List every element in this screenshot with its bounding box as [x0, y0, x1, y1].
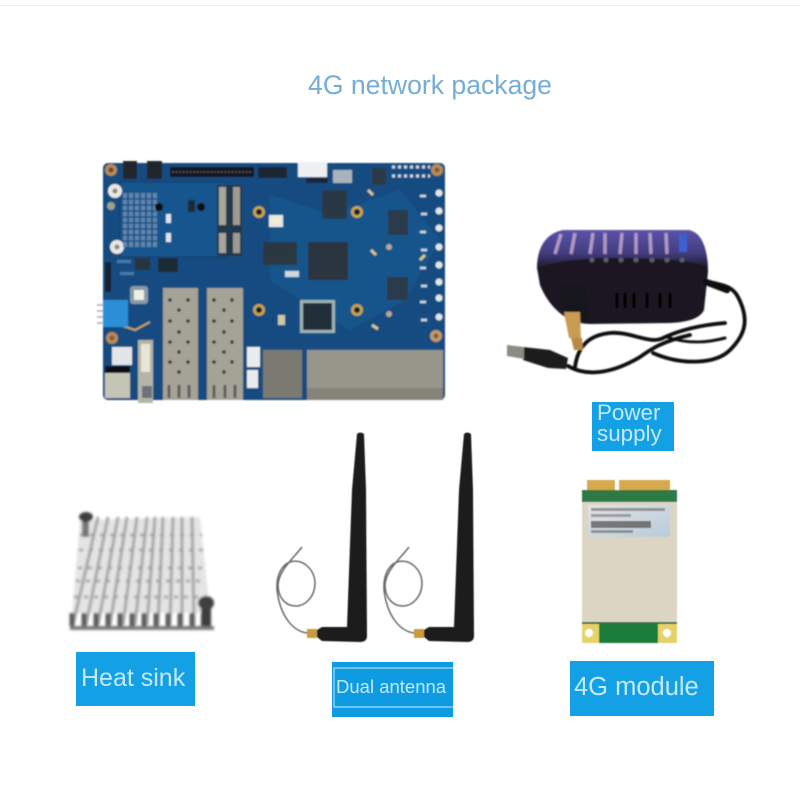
label: 4G module: 4G module: [574, 673, 699, 701]
antenna 1: [277, 432, 367, 642]
mounting holes: [105, 164, 443, 344]
label: power supply: Power: [597, 400, 661, 425]
adapter cable: [568, 282, 745, 372]
antenna 2: [384, 432, 474, 642]
RJ45 ports and connectors: [247, 347, 443, 400]
heat sink screws: [79, 512, 214, 626]
label: 4G module: [570, 661, 714, 716]
label: power supply: supply: [597, 421, 663, 446]
router board: [97, 161, 445, 403]
DC barrel connector: [507, 345, 568, 369]
SFP cages: [163, 288, 243, 400]
PCB pad grid: [123, 193, 205, 247]
left edge parts: [97, 300, 153, 403]
label: heat sink: Heat sink: [81, 664, 186, 692]
module sticker: [588, 505, 670, 537]
title: 4G network package: [308, 70, 552, 100]
top connectors: [123, 161, 430, 185]
status LED and small parts: [105, 258, 178, 330]
4G module: [582, 480, 677, 643]
label: dual antenna: [332, 662, 453, 717]
chips: [263, 190, 408, 333]
adapter body: [537, 230, 708, 324]
right side pads: [368, 190, 442, 329]
power adapter: [507, 230, 745, 372]
adapter plug pins: [558, 285, 590, 350]
M.2 slot: [217, 185, 242, 256]
label: power supply: [592, 400, 674, 451]
heat sink: [70, 512, 214, 630]
label: dual antenna: Dual antenna: [336, 676, 447, 697]
label: heat sink: [76, 652, 195, 706]
